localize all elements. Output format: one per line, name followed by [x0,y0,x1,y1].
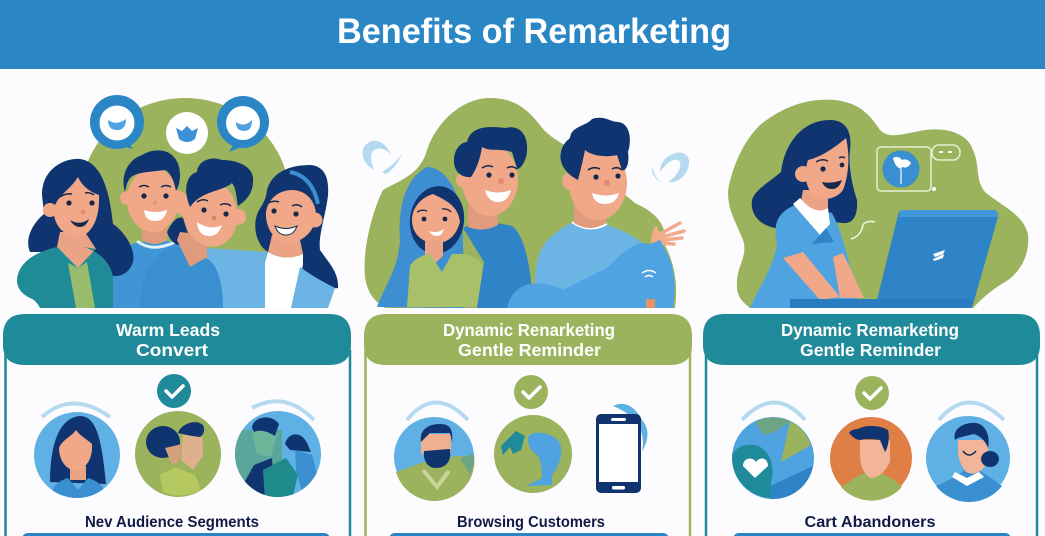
icon: music squiggle [851,221,875,239]
icon: speech bubble right [217,96,269,152]
panel header: Convert [136,340,208,360]
avatar: man with child [230,401,321,500]
next section pill [733,533,1011,536]
icon: check badge [514,375,548,409]
panel header [3,314,351,365]
icon: wifi [642,270,656,277]
panel: Dynamic Remarketing Gentle Reminder [703,314,1040,536]
avatar: heart with geometric shapes [732,402,814,499]
panel header [364,314,692,365]
person: man front centre [140,158,268,308]
blue pet with wifi symbol [507,240,675,308]
icon: right swirl [652,152,689,183]
label: audience segment: Cart Abandoners [804,514,936,531]
panel: Dynamic Renarketing Gentle Reminder [364,314,692,536]
illustration: three people with blue pet [362,98,689,308]
panel header [703,314,1040,365]
title: Benefits of Remarketing [337,12,731,51]
illustration: woman at laptop [728,100,1028,308]
icon: left swirl [362,141,402,174]
hand waving [651,223,684,244]
label: audience segment: Browsing Customers [457,514,605,531]
icon: check badge [855,376,889,410]
person: man in blue shirt [454,127,533,308]
laptop [790,210,998,308]
panel: Warm Leads Convert [3,314,351,536]
person: man in light blue shirt [535,118,660,308]
panel header: Warm Leads [116,320,220,340]
person: woman left [17,159,133,308]
illustration: group of four smiling people [17,95,338,308]
panel header: Dynamic Remarketing [781,320,959,340]
panel header: Gentle Reminder [800,340,941,360]
panel header: Dynamic Renarketing [443,320,615,340]
avatar: bearded man [394,402,474,501]
avatar: green circle with blue shapes [494,415,572,493]
icon: floating UI card [877,145,960,191]
avatar: two people on green [135,411,221,497]
person: woman with dark hair [750,120,864,308]
icon: white bubble centre [166,112,208,154]
person: man back centre [113,150,210,308]
person: woman in hood [377,167,486,308]
avatar: man on orange [830,417,912,501]
header banner [0,0,1045,69]
panel header: Gentle Reminder [458,340,601,360]
person: woman right [255,165,338,308]
icon: check badge [157,374,191,408]
icon: speech bubble left [90,95,144,149]
next section pill [389,533,669,536]
icon: smartphone [596,404,648,493]
label: audience segment: Nev Audience Segments [85,514,259,531]
avatar: woman with ponytail [926,402,1010,502]
next section pill [22,533,330,536]
avatar: woman with long hair [34,404,120,500]
